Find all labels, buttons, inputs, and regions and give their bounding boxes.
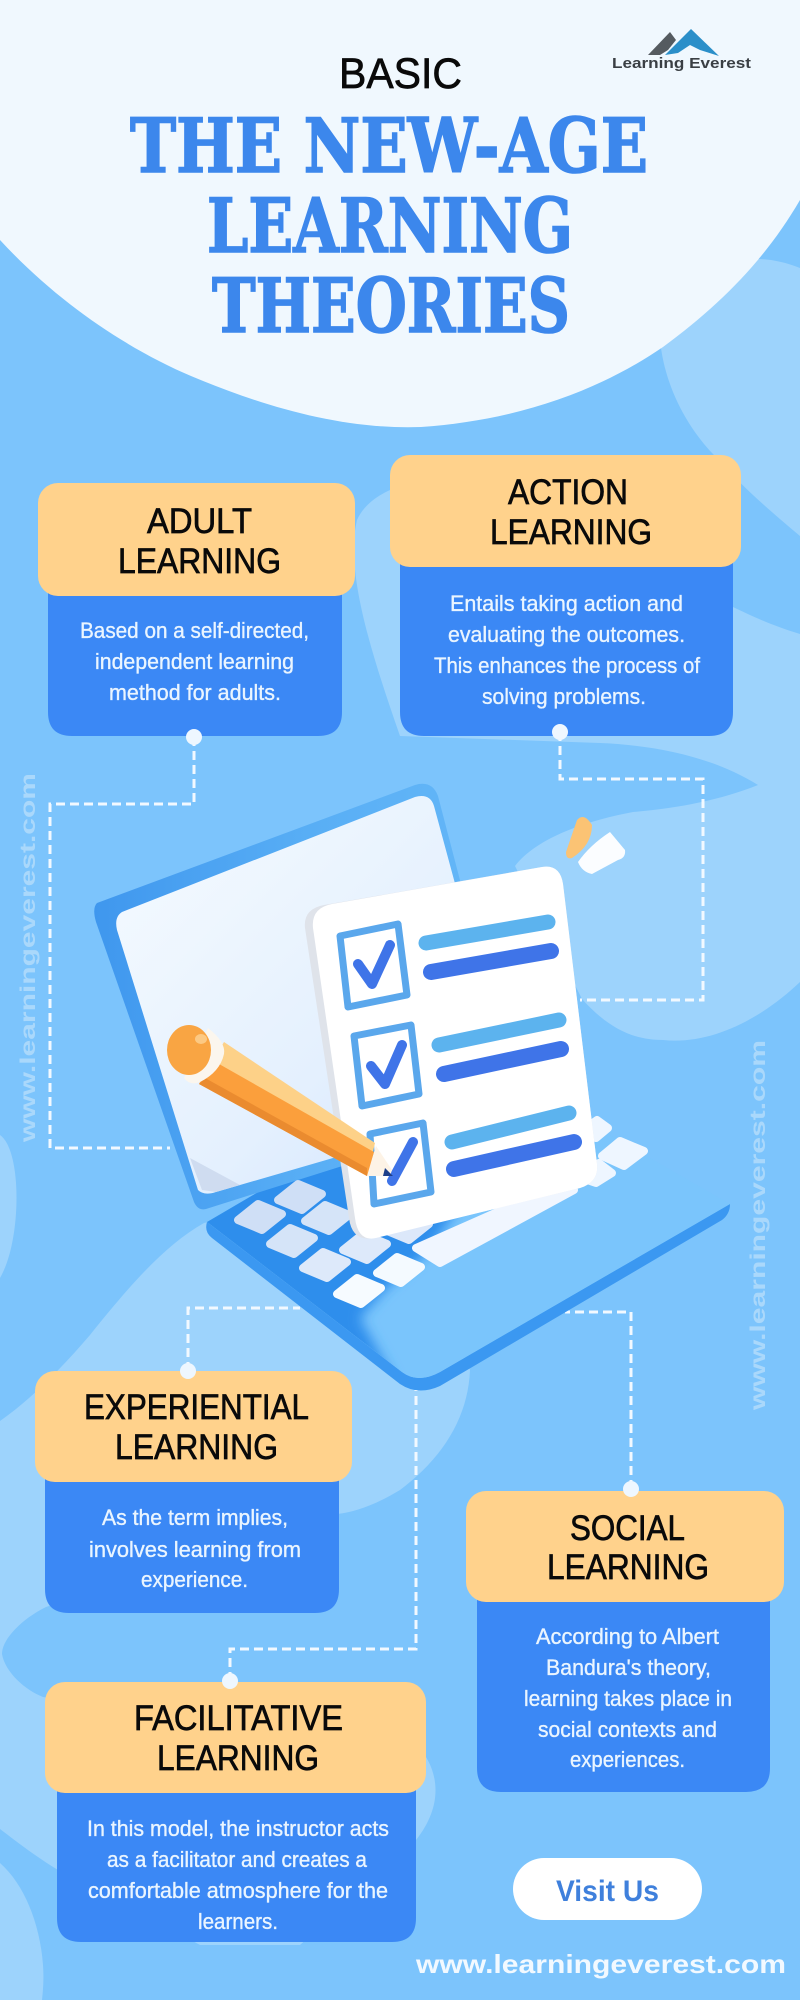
text: Based on a self-directed, — [80, 618, 309, 643]
laptop base — [206, 1112, 730, 1391]
connector dot — [552, 724, 568, 740]
body — [400, 540, 733, 736]
title — [130, 102, 648, 350]
text: evaluating the outcomes. — [448, 622, 685, 647]
pencil — [167, 1025, 393, 1176]
panel: experiential learning — [35, 1363, 352, 1613]
text — [434, 591, 701, 709]
heading — [84, 1388, 309, 1467]
checklist row 2 — [354, 1020, 561, 1106]
icon: white spark — [578, 832, 625, 874]
heading — [547, 1509, 709, 1587]
keyboard well — [207, 1166, 462, 1368]
connector: experiential learning — [188, 1308, 300, 1371]
vertical website label left: www.learningeverest.com — [17, 773, 40, 1143]
text: experiences. — [570, 1747, 685, 1772]
text — [87, 1816, 389, 1934]
heading: LEARNING — [115, 1428, 278, 1467]
text: involves learning from — [89, 1537, 301, 1562]
icon: orange spark — [566, 817, 592, 858]
text: learners. — [198, 1909, 278, 1934]
heading — [118, 502, 281, 581]
text: experience. — [141, 1567, 248, 1592]
heading: EXPERIENTIAL — [84, 1388, 309, 1427]
checklist row 3 — [370, 1113, 574, 1204]
title: THEORIES — [212, 262, 570, 350]
header white shape — [0, 0, 800, 427]
laptop screen — [94, 784, 520, 1209]
text: Bandura's theory, — [546, 1655, 711, 1680]
panel: adult learning — [38, 483, 355, 745]
heading: ACTION — [508, 473, 628, 512]
heading: ADULT — [147, 502, 252, 541]
text: as a facilitator and creates a — [107, 1847, 368, 1872]
text — [524, 1624, 732, 1772]
heading: LEARNING — [490, 513, 652, 552]
panel: social learning — [466, 1481, 784, 1792]
text — [80, 618, 309, 705]
title: THE NEW-AGE — [130, 102, 648, 190]
connector: adult learning — [50, 737, 194, 1148]
text: Entails taking action and — [450, 591, 683, 616]
body — [477, 1570, 770, 1792]
header — [466, 1491, 784, 1602]
header — [38, 483, 355, 596]
header — [45, 1682, 426, 1793]
text: method for adults. — [109, 680, 281, 705]
heading — [490, 473, 652, 552]
illustration: laptop with checklist and pencil — [94, 784, 730, 1400]
button: Visit Us: Visit Us — [556, 1875, 659, 1908]
logo: Learning Everest — [612, 29, 751, 72]
keyboard keys — [238, 1120, 644, 1304]
connector dot — [222, 1673, 238, 1689]
heading: LEARNING — [118, 542, 281, 581]
checklist row 1 — [340, 922, 551, 1007]
heading: LEARNING — [547, 1548, 709, 1587]
logo: Learning Everest: Learning Everest — [612, 55, 751, 72]
connector: social learning — [565, 1312, 631, 1489]
heading: SOCIAL — [570, 1509, 685, 1548]
panel: facilitative learning — [45, 1673, 426, 1942]
checklist paper — [305, 867, 597, 1239]
website footer: www.learningeverest.com — [415, 1949, 786, 1979]
connector dot — [623, 1481, 639, 1497]
connector dot — [186, 729, 202, 745]
connector: facilitative learning — [230, 1385, 416, 1681]
body — [48, 560, 342, 736]
button: Visit Us — [513, 1858, 702, 1920]
text: social contexts and — [538, 1717, 717, 1742]
header — [390, 455, 741, 567]
text: solving problems. — [482, 684, 646, 709]
connector dot — [180, 1363, 196, 1379]
text — [89, 1505, 301, 1592]
body — [45, 1450, 339, 1613]
text: learning takes place in — [524, 1686, 732, 1711]
heading: BASIC: BASIC — [339, 50, 462, 98]
heading: FACILITATIVE — [134, 1699, 343, 1738]
text: According to Albert — [536, 1624, 719, 1649]
connector: action learning — [560, 732, 703, 1000]
header — [35, 1371, 352, 1482]
panel: action learning — [390, 455, 741, 740]
text: As the term implies, — [102, 1505, 288, 1530]
title: LEARNING — [207, 182, 573, 270]
heading — [134, 1699, 343, 1778]
text: independent learning — [95, 649, 294, 674]
text: In this model, the instructor acts — [87, 1816, 389, 1841]
text: This enhances the process of — [434, 653, 701, 678]
body — [57, 1760, 416, 1942]
text: comfortable atmosphere for the — [88, 1878, 388, 1903]
vertical website label right: www.learningeverest.com — [747, 1040, 770, 1411]
heading: LEARNING — [157, 1739, 319, 1778]
